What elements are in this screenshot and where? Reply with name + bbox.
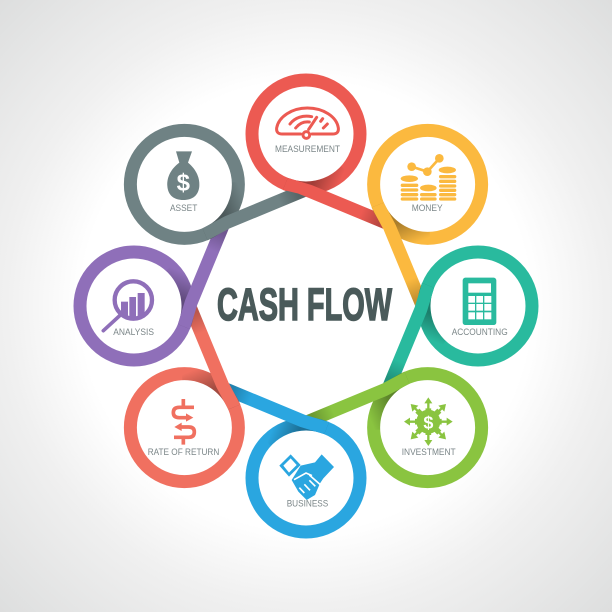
- step: business: [229, 383, 360, 532]
- label: measurement: MEASUREMENT: [275, 144, 340, 155]
- ring and ribbon: business: [229, 383, 360, 532]
- ring and ribbon: measurement: [252, 80, 383, 229]
- icon: dollar with outward arrows: [404, 397, 453, 446]
- ring and ribbon: analysis: [80, 229, 229, 360]
- label: asset: ASSET: [170, 203, 197, 214]
- step: asset: [108, 92, 306, 290]
- icon: coins and trend: [401, 154, 456, 201]
- step: measurement: [252, 80, 383, 229]
- icon: dollar sign with arrows: [173, 399, 194, 445]
- step: accounting: [383, 252, 532, 383]
- label: business: BUSINESS: [287, 499, 328, 510]
- icon: gauge: [277, 108, 338, 138]
- step: rate of return: [92, 306, 290, 504]
- step: money: [322, 108, 520, 306]
- ring and ribbon: accounting: [383, 252, 532, 383]
- icon: dollar with outward arrows: $: [423, 412, 433, 432]
- label: investment: INVESTMENT: [402, 447, 456, 458]
- ring and ribbon: investment: [306, 322, 504, 520]
- step: investment: [306, 322, 504, 520]
- ring and ribbon: asset: [108, 92, 306, 290]
- title: CASH FLOW: [217, 279, 392, 330]
- icon: magnifier with bars: [103, 281, 152, 331]
- icon: money bag: [167, 151, 199, 200]
- step: analysis: [80, 229, 229, 360]
- label: accounting: ACCOUNTING: [452, 327, 508, 338]
- cash flow cycle diagram: [74, 74, 538, 538]
- icon: handshake: [279, 454, 334, 500]
- label: analysis: ANALYSIS: [113, 327, 154, 338]
- label: rate of return: RATE OF RETURN: [148, 447, 219, 458]
- ring and ribbon: money: [322, 108, 520, 306]
- icon: money bag: $: [177, 170, 190, 197]
- ring and ribbon: rate of return: [92, 306, 290, 504]
- icon: calculator: [463, 278, 496, 325]
- label: money: MONEY: [412, 203, 443, 214]
